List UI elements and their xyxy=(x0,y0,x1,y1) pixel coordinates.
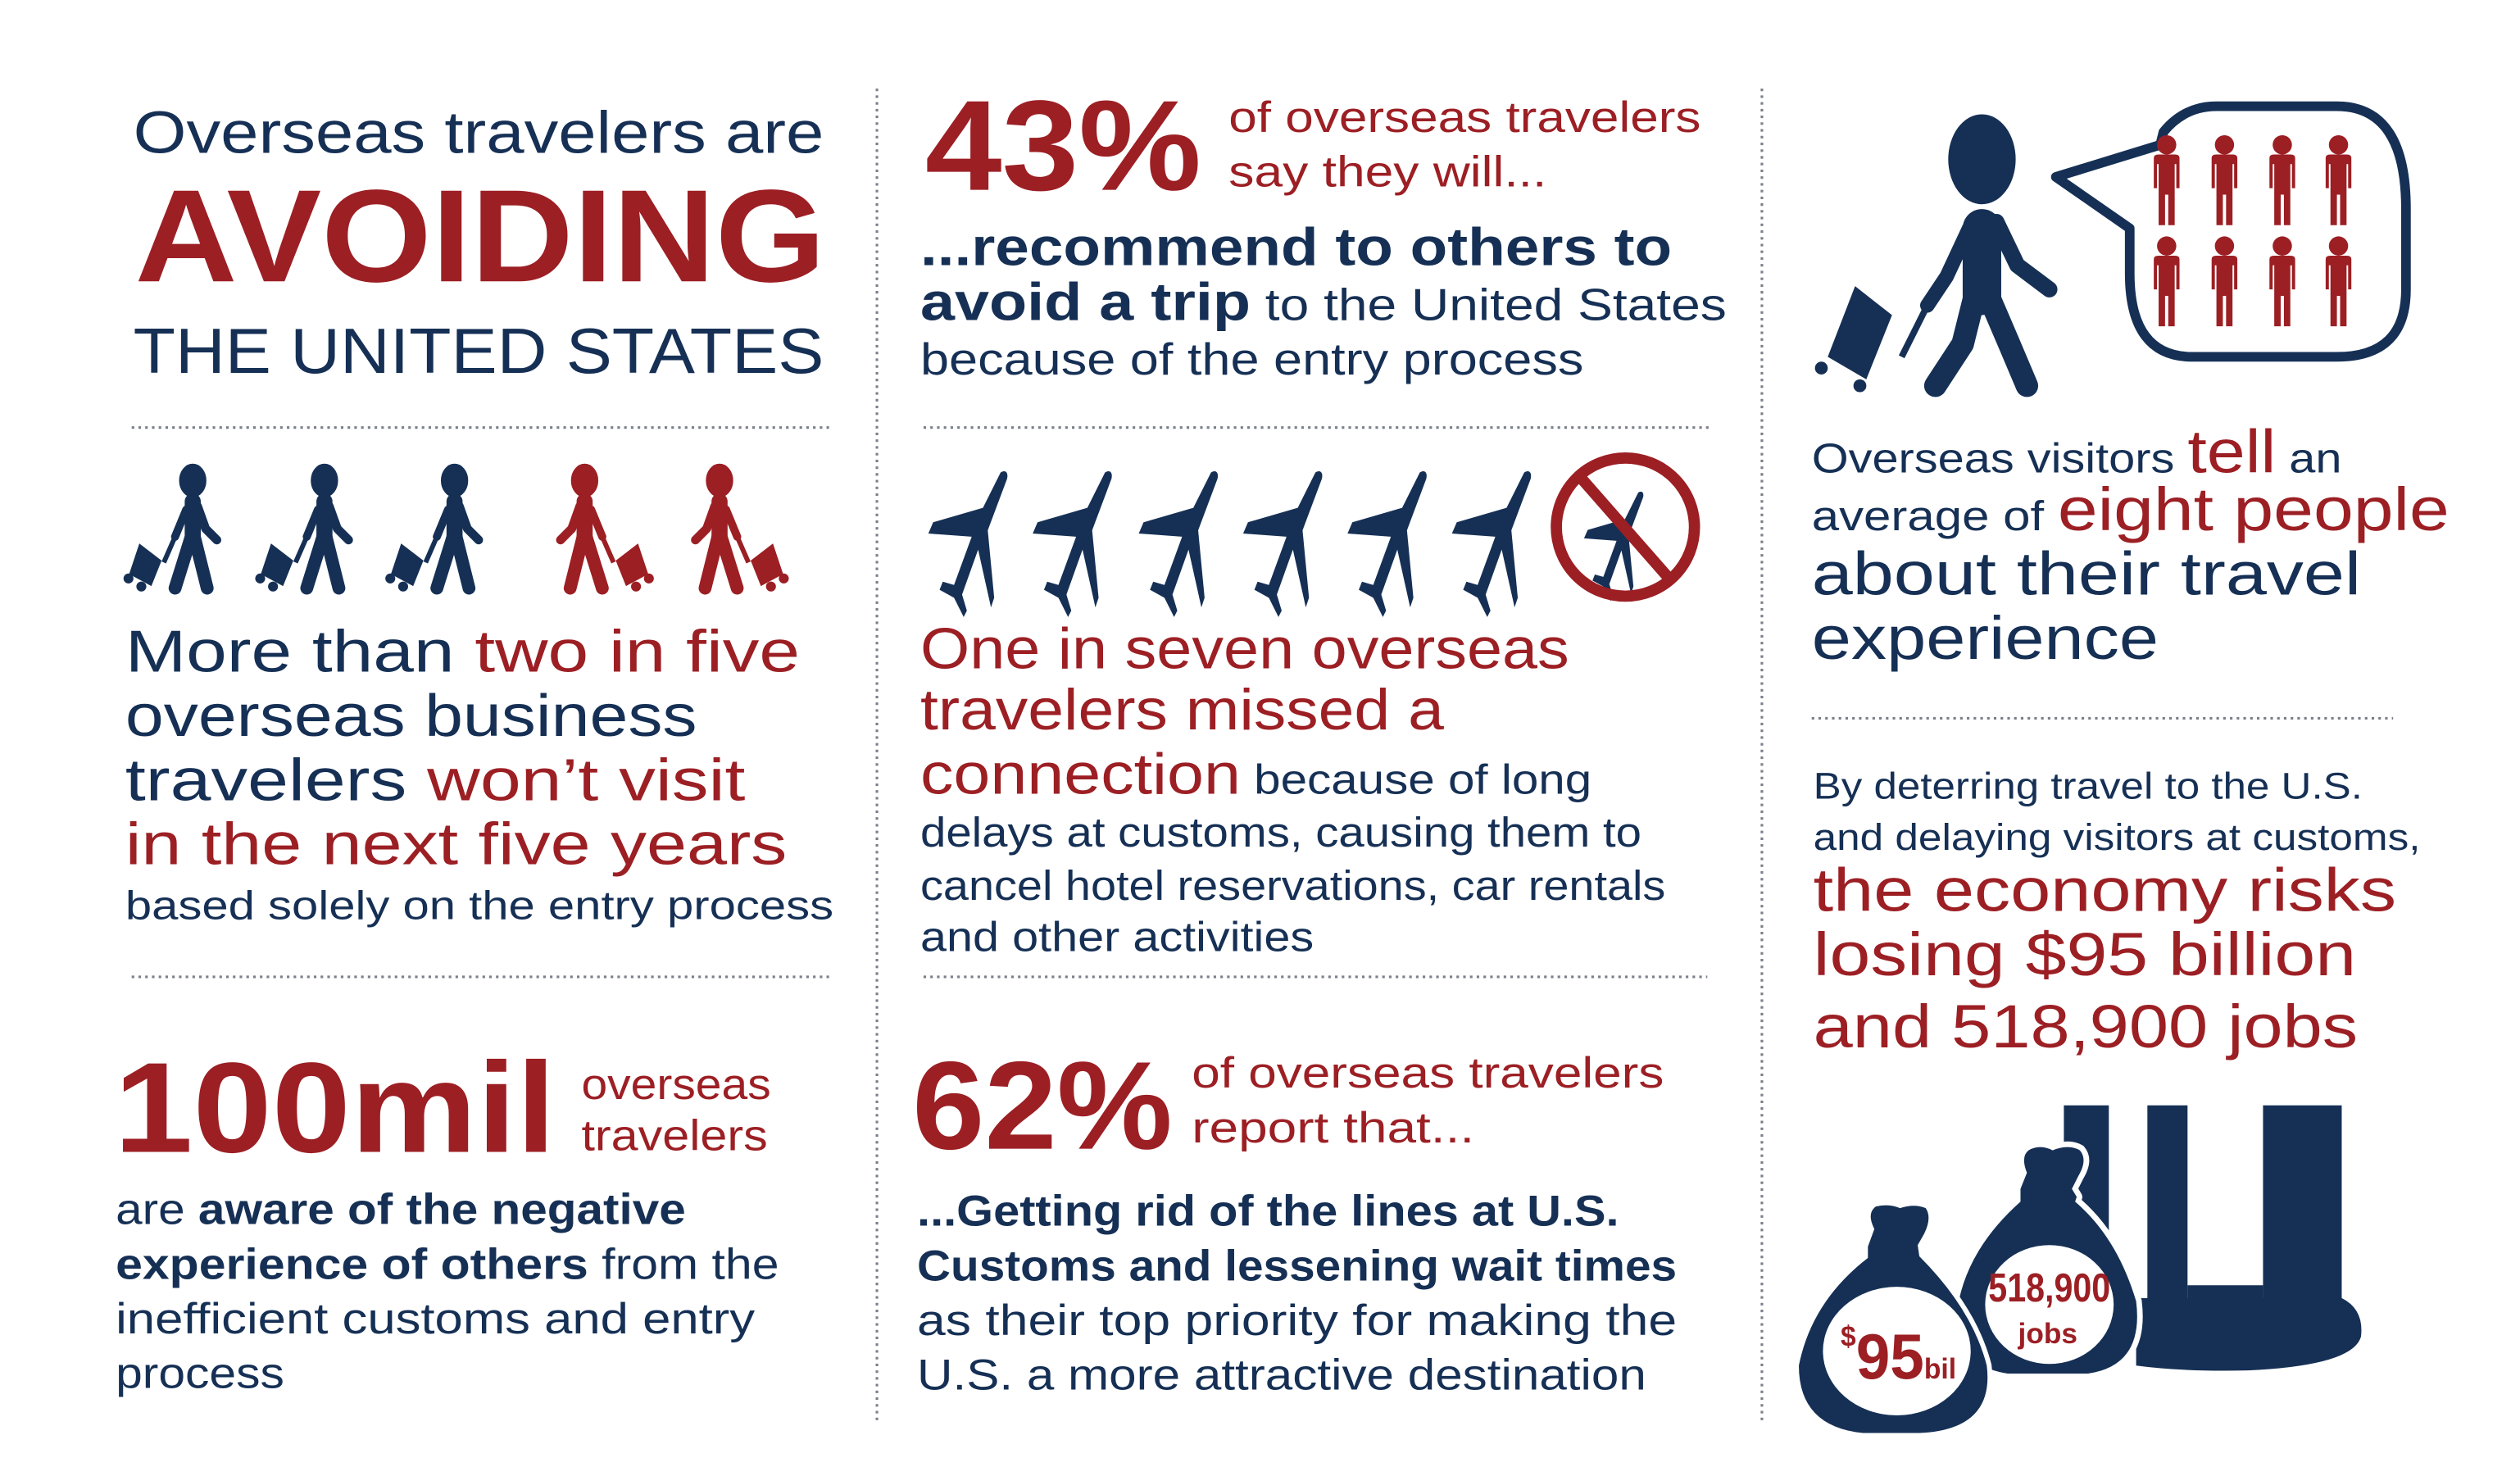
text: two in five: More than two in five xyxy=(125,619,800,685)
text: two in five: overseas business xyxy=(125,683,697,749)
text: recommend to avoid: avoid a trip to the United States xyxy=(920,271,1727,331)
text: getting rid of lines xyxy=(917,1188,1677,1400)
text: aware of negative experience: process xyxy=(116,1350,284,1398)
stat: 43%: of overseas travelers xyxy=(1228,93,1700,142)
text: one in seven: travelers missed a xyxy=(920,677,1445,742)
text: aware of negative experience: inefficient customs and entry xyxy=(116,1295,756,1343)
text: one in seven: and other activities xyxy=(920,914,1314,961)
text: recommend to avoid xyxy=(920,217,1727,384)
icon: traveler with speech bubble xyxy=(1815,107,2406,393)
text: getting rid of lines: Customs and lessening wait times xyxy=(917,1242,1677,1290)
text: one in seven: connection because of long xyxy=(920,741,1591,806)
title xyxy=(134,100,825,387)
text: two in five: based solely on the entry process xyxy=(125,883,833,928)
title: AVOIDING xyxy=(135,163,825,310)
bag: $95bil: bil xyxy=(1924,1353,1956,1385)
bag: 518,900 jobs xyxy=(1956,1147,2137,1374)
text: aware of negative experience xyxy=(116,1186,779,1398)
stat: 62%: of overseas travelers xyxy=(1192,1049,1664,1097)
stat: 62% xyxy=(912,1037,1664,1176)
text: recommend to avoid: ...recommend to others to xyxy=(920,217,1672,277)
text: one in seven: cancel hotel reservations, car rentals xyxy=(920,862,1665,909)
text: getting rid of lines: as their top priority for making the xyxy=(917,1297,1677,1345)
icon: airplanes with no-sign xyxy=(929,458,1695,617)
stat: 100mil: travelers xyxy=(581,1112,768,1160)
icon: walking travelers xyxy=(125,465,788,591)
stat: 62%: report that... xyxy=(1192,1104,1474,1152)
text: one in seven xyxy=(920,616,1665,961)
text: aware of negative experience: are aware of the negative xyxy=(116,1186,686,1234)
stat: 100mil xyxy=(114,1037,771,1180)
text: one in seven: One in seven overseas xyxy=(920,616,1569,681)
stat: 100mil: 100mil xyxy=(114,1037,556,1180)
text: tell eight people: average of eight people xyxy=(1812,475,2450,543)
stat: 43% xyxy=(925,75,1700,218)
text: aware of negative experience: experience of others from the xyxy=(116,1240,779,1288)
text: economy risks: the economy risks xyxy=(1814,856,2396,924)
text: two in five: travelers won’t visit xyxy=(125,747,745,813)
text: economy risks: By deterring travel to the U.S. xyxy=(1814,765,2363,806)
text: economy risks: and delaying visitors at customs, xyxy=(1814,816,2420,858)
text: economy risks: and 518,900 jobs xyxy=(1814,992,2358,1061)
bag: $95bil: 95 xyxy=(1856,1320,1924,1392)
stat: 62%: 62% xyxy=(912,1037,1173,1176)
bag: 518,900 jobs: jobs xyxy=(2018,1318,2077,1350)
stat: 100mil: overseas xyxy=(581,1061,771,1109)
bag: 518,900 jobs: 518,900 xyxy=(1988,1266,2110,1310)
text: getting rid of lines: U.S. a more attractive destination xyxy=(917,1351,1646,1400)
stat: 43%: 43% xyxy=(925,75,1201,218)
title: Overseas travelers are xyxy=(134,100,824,166)
text: getting rid of lines: ...Getting rid of the lines at U.S. xyxy=(917,1188,1619,1236)
text: economy risks: losing $95 billion xyxy=(1814,920,2356,988)
text: two in five: in the next five years xyxy=(125,811,787,878)
text: two in five xyxy=(125,619,833,928)
text: tell eight people: experience xyxy=(1812,604,2159,672)
stat: 43%: say they will... xyxy=(1228,148,1546,197)
text: tell eight people: about their travel xyxy=(1812,539,2361,607)
bag: $95bil xyxy=(1799,1206,1987,1433)
text: tell eight people xyxy=(1812,418,2450,672)
bag: $95bil: $ xyxy=(1841,1321,1856,1353)
icon: column and money bags xyxy=(1799,1106,2361,1433)
text: one in seven: delays at customs, causing them to xyxy=(920,809,1641,856)
title: THE UNITED STATES xyxy=(134,315,824,387)
text: recommend to avoid: because of the entry process xyxy=(920,334,1583,384)
text: economy risks xyxy=(1814,765,2420,1061)
text: tell eight people: Overseas visitors tell an xyxy=(1812,418,2341,486)
